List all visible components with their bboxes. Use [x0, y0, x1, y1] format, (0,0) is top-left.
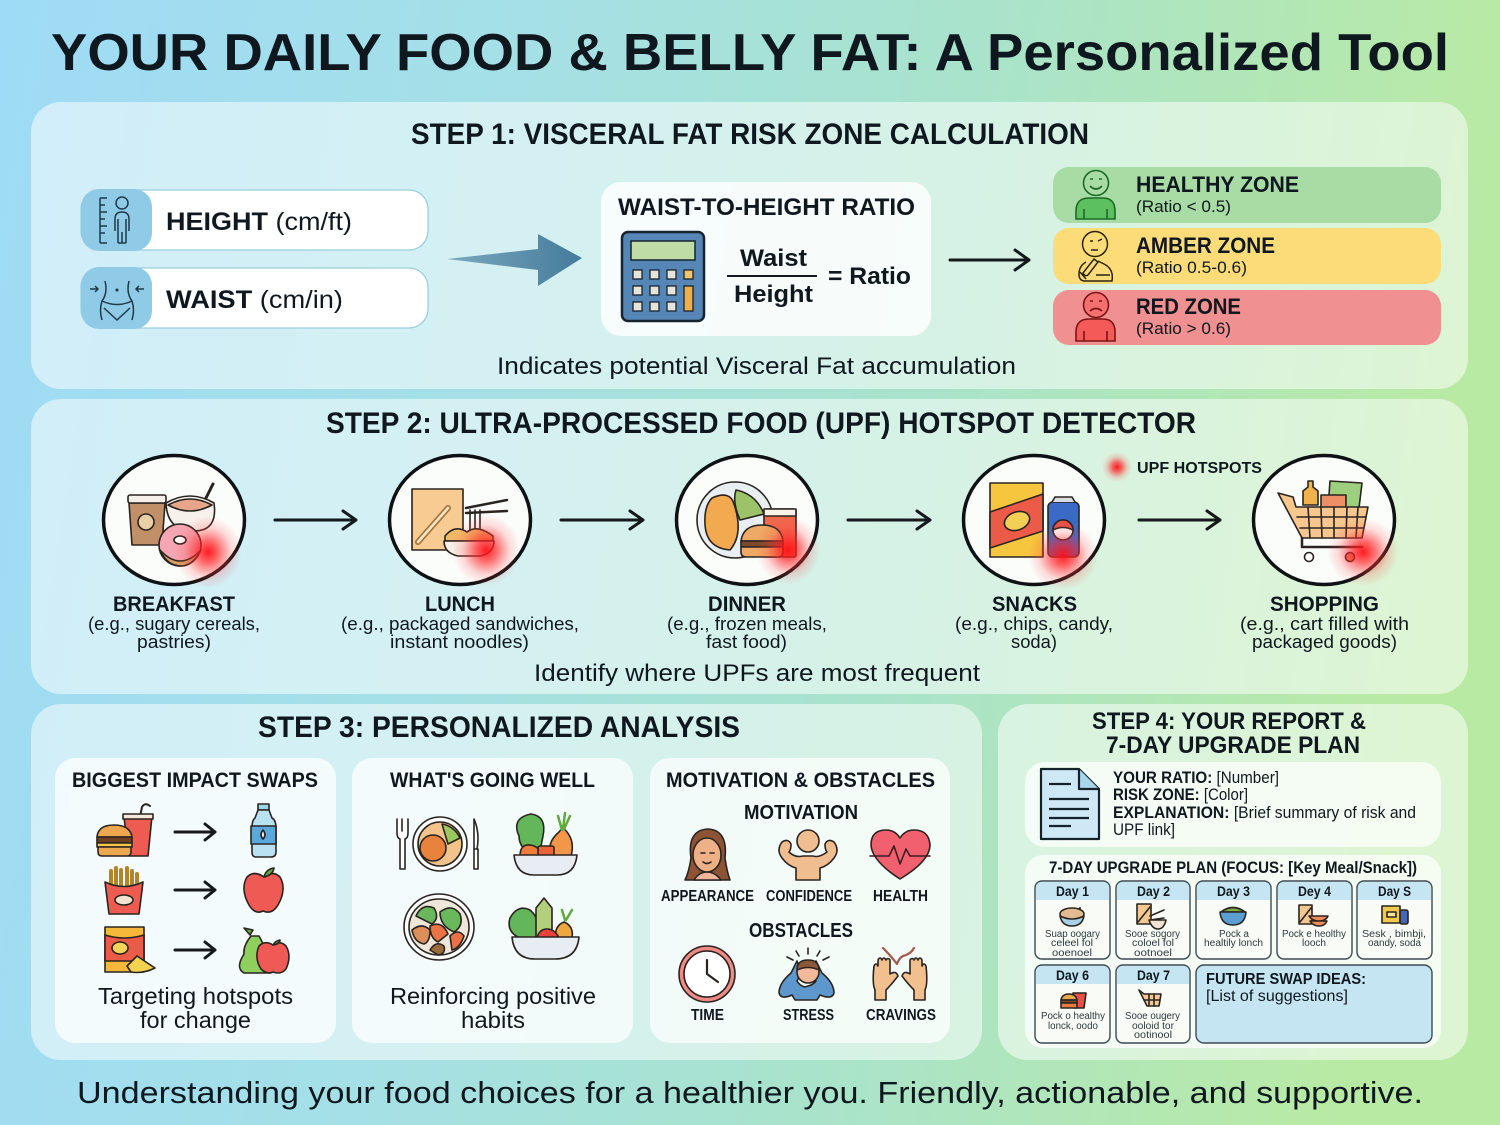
day 1: Suap oogary: [1045, 929, 1100, 940]
heading: going well: WHAT'S GOING WELL: [390, 769, 595, 792]
day 7: [1116, 965, 1190, 1043]
day 3: [1196, 881, 1271, 959]
heading: swaps: BIGGEST IMPACT SWAPS: [72, 769, 318, 792]
day 6: lonck, oodo: [1048, 1021, 1098, 1032]
caption: step 1: Indicates potential Visceral Fat accumulation: [497, 353, 1016, 380]
subheading: obstacles: OBSTACLES: [749, 920, 853, 942]
label: snacks: SNACKS: [992, 593, 1077, 616]
formula: Waist: [740, 245, 807, 272]
labels: motivation: APPEARANCE: [661, 888, 754, 905]
day 3: healtily lonch: [1204, 938, 1263, 949]
day 5: [1357, 881, 1432, 959]
heading: plan: 7-DAY UPGRADE PLAN (FOCUS: [Key Meal/Snack]): [1049, 858, 1417, 877]
arrow: [275, 511, 356, 529]
heading: step 2: STEP 2: ULTRA-PROCESSED FOOD (UPF) HOTSPOT DETECTOR: [326, 407, 1196, 440]
hotspot: [174, 516, 242, 588]
text: healthy: HEALTHY ZONE: [1136, 172, 1299, 197]
day 1: Day 1: [1056, 884, 1089, 899]
hotspot: [1028, 522, 1098, 590]
hotspot: [452, 514, 520, 586]
stage: dinner: [667, 456, 827, 652]
day 3: Pock a: [1219, 929, 1249, 940]
formula: Height: [734, 281, 813, 308]
label: height: HEIGHT (cm/ft): [166, 208, 352, 236]
arrow: [175, 942, 215, 958]
day 4: Dey 4: [1298, 884, 1331, 899]
icon: shopping cart: [1278, 481, 1368, 562]
zone: amber: (Ratio 0.5-0.6): [1136, 259, 1247, 277]
label: breakfast: pastries): [137, 632, 211, 652]
card: biggest impact swaps: [55, 758, 336, 1043]
caption: swaps: for change: [140, 1007, 251, 1033]
heading: motivation and obstacles: MOTIVATION & OBSTACLES: [666, 769, 935, 792]
card: what's going well: [352, 758, 633, 1043]
label: snacks: soda): [1011, 632, 1057, 652]
zone: red: [1053, 290, 1441, 345]
icon: time clock: [679, 946, 735, 1002]
icon: appearance: [685, 829, 730, 880]
labels: obstacles: CRAVINGS: [866, 1007, 936, 1024]
day 7: Sooe ougery: [1125, 1011, 1180, 1022]
heading: ratio: WAIST-TO-HEIGHT RATIO: [618, 194, 915, 221]
card: motivation and obstacles: [650, 758, 950, 1043]
label: dinner: [667, 593, 827, 652]
icon: apple: [244, 868, 283, 912]
title: YOUR DAILY FOOD & BELLY FAT: A Personalized Tool: [51, 24, 1449, 82]
icon: document: [1041, 769, 1099, 839]
icon: chips and soda: [990, 483, 1079, 557]
panel: step 1 risk zone calculation: [31, 102, 1468, 389]
heading: step 4: 7-DAY UPGRADE PLAN: [1106, 732, 1360, 759]
icon: pear and apple: [240, 928, 289, 973]
icon: waist: [90, 281, 144, 320]
day 2: ootnoel: [1134, 948, 1172, 959]
icon: calculator: [622, 232, 704, 321]
label: lunch: LUNCH: [425, 593, 495, 616]
day 7: ootinool: [1134, 1030, 1172, 1041]
icon: confidence: [779, 830, 837, 880]
day 5: Sesk , bimbji,: [1362, 929, 1426, 940]
icon: sad person: [1076, 292, 1115, 341]
caption: step 2: Identify where UPFs are most frequent: [534, 660, 980, 687]
icon: smiling person: [1076, 170, 1115, 219]
zone: red: (Ratio > 0.6): [1136, 320, 1231, 338]
formula: = Ratio: [828, 263, 911, 290]
icon: thinking person: [1079, 232, 1112, 281]
panel: step 2 upf hotspot detector: [31, 399, 1468, 694]
icon: frozen meal and fast food: [697, 482, 796, 558]
stage: snacks: [955, 456, 1113, 652]
label: waist: WAIST (cm/in): [166, 286, 343, 314]
heading: step 1: STEP 1: VISCERAL FAT RISK ZONE CALCULATION: [411, 118, 1089, 151]
labels: motivation: HEALTH: [873, 888, 928, 905]
day 6: Day 6: [1056, 968, 1089, 983]
panel: step 3 personalized analysis: [31, 704, 982, 1060]
card: 7-day plan: [1025, 855, 1441, 1048]
caption: swaps: Targeting hotspots: [98, 983, 293, 1009]
footer tagline: Understanding your food choices for a healthier you. Friendly, actionable, and supportive.: [77, 1075, 1423, 1110]
zone: amber: [1053, 228, 1441, 284]
heading: step 3: STEP 3: PERSONALIZED ANALYSIS: [258, 711, 740, 744]
label: lunch: (e.g., packaged sandwiches,: [341, 614, 579, 634]
text: report: UPF link]: [1113, 820, 1175, 839]
day 2: [1116, 881, 1190, 959]
arrow: ratio to zones: [950, 250, 1029, 270]
label: snacks: [955, 593, 1113, 652]
day 4: looch: [1302, 938, 1326, 949]
arrow: [175, 824, 215, 840]
card: waist-to-height ratio: [601, 182, 931, 336]
text: red: RED ZONE: [1136, 294, 1241, 319]
day 5: oandy, soda: [1368, 938, 1421, 949]
stage: lunch: [341, 456, 579, 652]
caption: swaps: [98, 983, 293, 1033]
heading: step 4: [1092, 708, 1366, 759]
label: dinner: (e.g., frozen meals,: [667, 614, 827, 634]
arrow: inputs to ratio: [447, 234, 582, 286]
arrow: [1139, 511, 1220, 529]
day 1: ooenoel: [1052, 948, 1092, 959]
day 2: coloel fol: [1132, 938, 1174, 949]
day 6: [1035, 965, 1110, 1043]
caption: going well: habits: [461, 1007, 525, 1033]
text: amber: AMBER ZONE: [1136, 233, 1275, 258]
icon: burger and soda: [97, 804, 153, 856]
panel: step 4 report and plan: [998, 704, 1468, 1060]
icon: health heart: [870, 830, 930, 879]
text: report: EXPLANATION: [Brief summary of risk and: [1113, 803, 1416, 822]
day 7: Day 7: [1137, 968, 1170, 983]
labels: motivation: [661, 888, 928, 905]
day 2: Sooe sogory: [1125, 929, 1180, 940]
icon: stress: [779, 948, 834, 1000]
label: snacks: (e.g., chips, candy,: [955, 614, 1113, 634]
icon: ruler and person: [100, 197, 129, 243]
label: lunch: [341, 593, 579, 652]
day 4: [1277, 881, 1352, 959]
input: waist: [81, 267, 428, 329]
zone: healthy: [1053, 167, 1441, 223]
labels: motivation: CONFIDENCE: [766, 888, 852, 905]
legend: upf hotspots: UPF HOTSPOTS: [1137, 460, 1262, 477]
icon: salad bowl: [509, 898, 579, 959]
labels: obstacles: [691, 1007, 936, 1024]
label: shopping: [1240, 593, 1409, 652]
label: dinner: fast food): [706, 632, 787, 652]
icon: coffee, cereal, donut: [128, 484, 215, 566]
icon: cravings: [873, 948, 927, 1000]
label: breakfast: (e.g., sugary cereals,: [88, 614, 260, 634]
label: breakfast: [88, 593, 260, 652]
zone: healthy: (Ratio < 0.5): [1136, 198, 1231, 216]
hotspot: [1327, 518, 1399, 586]
icon: salad plate: [404, 894, 474, 960]
day 5: Day S: [1378, 884, 1411, 899]
legend: upf hotspots: [1102, 452, 1262, 482]
label: dinner: DINNER: [708, 593, 786, 616]
text: report: [1113, 768, 1416, 839]
label: breakfast: BREAKFAST: [113, 593, 235, 616]
subheading: motivation: MOTIVATION: [744, 802, 858, 824]
caption: going well: [390, 983, 596, 1033]
formula: [727, 245, 911, 308]
heading: step 4: STEP 4: YOUR REPORT &: [1092, 708, 1366, 735]
icon: packaged sandwich and noodles: [412, 489, 507, 556]
box: future swap ideas: FUTURE SWAP IDEAS:: [1206, 971, 1366, 988]
arrow: [561, 511, 643, 529]
day 1: [1035, 881, 1110, 959]
icon: fries: [105, 868, 143, 914]
card: report: [1025, 762, 1441, 847]
text: report: YOUR RATIO: [Number]: [1113, 768, 1279, 787]
icon: vegetable bowl: [514, 813, 577, 875]
icon: balanced plate with cutlery: [397, 817, 478, 871]
box: future swap ideas: [1196, 965, 1432, 1043]
day 7: ooloid tor: [1132, 1021, 1175, 1032]
hotspot: [756, 516, 820, 584]
input: height: [81, 189, 428, 251]
icon: water bottle: [251, 804, 276, 857]
day 2: Day 2: [1137, 884, 1170, 899]
label: shopping: SHOPPING: [1270, 593, 1379, 616]
label: shopping: (e.g., cart filled with: [1240, 614, 1409, 634]
labels: obstacles: TIME: [691, 1007, 724, 1024]
day 4: Pock e heolthy: [1282, 929, 1346, 940]
box: future swap ideas: [List of suggestions]: [1206, 988, 1348, 1005]
label: lunch: instant noodles): [390, 632, 529, 652]
stage: shopping: [1240, 456, 1409, 652]
text: report: RISK ZONE: [Color]: [1113, 785, 1248, 804]
icon: chips bag: [105, 927, 155, 972]
stage: breakfast: [88, 456, 260, 652]
arrow: [175, 882, 215, 898]
caption: going well: Reinforcing positive: [390, 983, 596, 1009]
day 6: Pock o healthy: [1041, 1011, 1105, 1022]
day 1: celeel fol: [1051, 938, 1093, 949]
arrow: [848, 511, 930, 529]
day 3: Day 3: [1217, 884, 1250, 899]
labels: obstacles: STRESS: [783, 1007, 834, 1024]
label: shopping: packaged goods): [1252, 632, 1397, 652]
